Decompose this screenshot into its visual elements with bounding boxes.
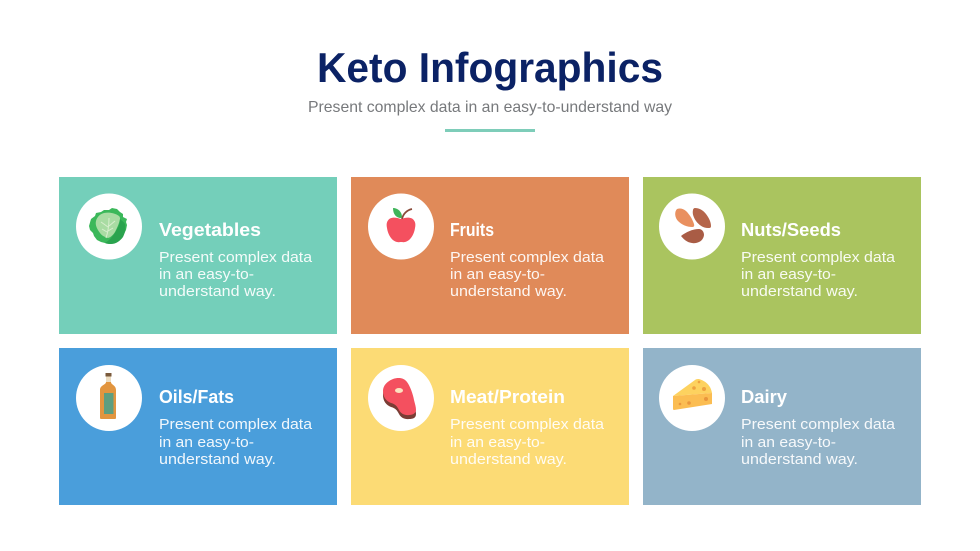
panel: dairy — [643, 348, 921, 505]
text: vegetables description: in an easy-to- — [159, 266, 254, 283]
text: nuts and seeds description: understand way. — [741, 283, 858, 300]
text: fruits description: understand way. — [450, 283, 567, 300]
heading: meat and protein: Meat/Protein — [450, 386, 565, 407]
heading: nuts and seeds: Nuts/Seeds — [741, 219, 841, 240]
title underline accent — [445, 129, 535, 132]
icon: oil bottle — [100, 373, 116, 419]
text: meat and protein description: understand way. — [450, 451, 567, 468]
text: oils and fats description: understand way. — [159, 451, 276, 468]
icon: apple — [387, 208, 415, 242]
heading: oils and fats: Oils/Fats — [159, 386, 234, 407]
text: vegetables description: Present complex data — [159, 249, 313, 266]
heading: fruits: Fruits — [450, 219, 494, 240]
text: meat and protein description: in an easy-to- — [450, 434, 545, 451]
subtitle: Present complex data in an easy-to-understand way — [308, 99, 672, 116]
panel: nuts and seeds — [643, 177, 921, 334]
text: meat and protein description: Present complex data — [450, 416, 605, 433]
text: fruits description: in an easy-to- — [450, 266, 545, 283]
text: nuts and seeds description: Present complex data — [741, 249, 896, 266]
icon: almonds — [675, 208, 711, 243]
panel: oils and fats — [59, 348, 337, 505]
panel: vegetables — [59, 177, 337, 334]
title: Keto Infographics — [317, 44, 663, 91]
icon: cheese — [673, 379, 712, 410]
text: vegetables description: understand way. — [159, 283, 276, 300]
text: oils and fats description: in an easy-to- — [159, 434, 254, 451]
heading: vegetables: Vegetables — [159, 219, 261, 240]
text: fruits description: Present complex data — [450, 249, 605, 266]
icon: steak — [383, 378, 416, 419]
panel: fruits — [351, 177, 629, 334]
icon: cabbage — [89, 208, 127, 244]
heading: dairy: Dairy — [741, 386, 788, 407]
text: dairy description: in an easy-to- — [741, 434, 836, 451]
text: nuts and seeds description: in an easy-to- — [741, 266, 836, 283]
panel: meat and protein — [351, 348, 629, 505]
text: dairy description: understand way. — [741, 451, 858, 468]
text: oils and fats description: Present complex data — [159, 416, 313, 433]
text: dairy description: Present complex data — [741, 416, 896, 433]
